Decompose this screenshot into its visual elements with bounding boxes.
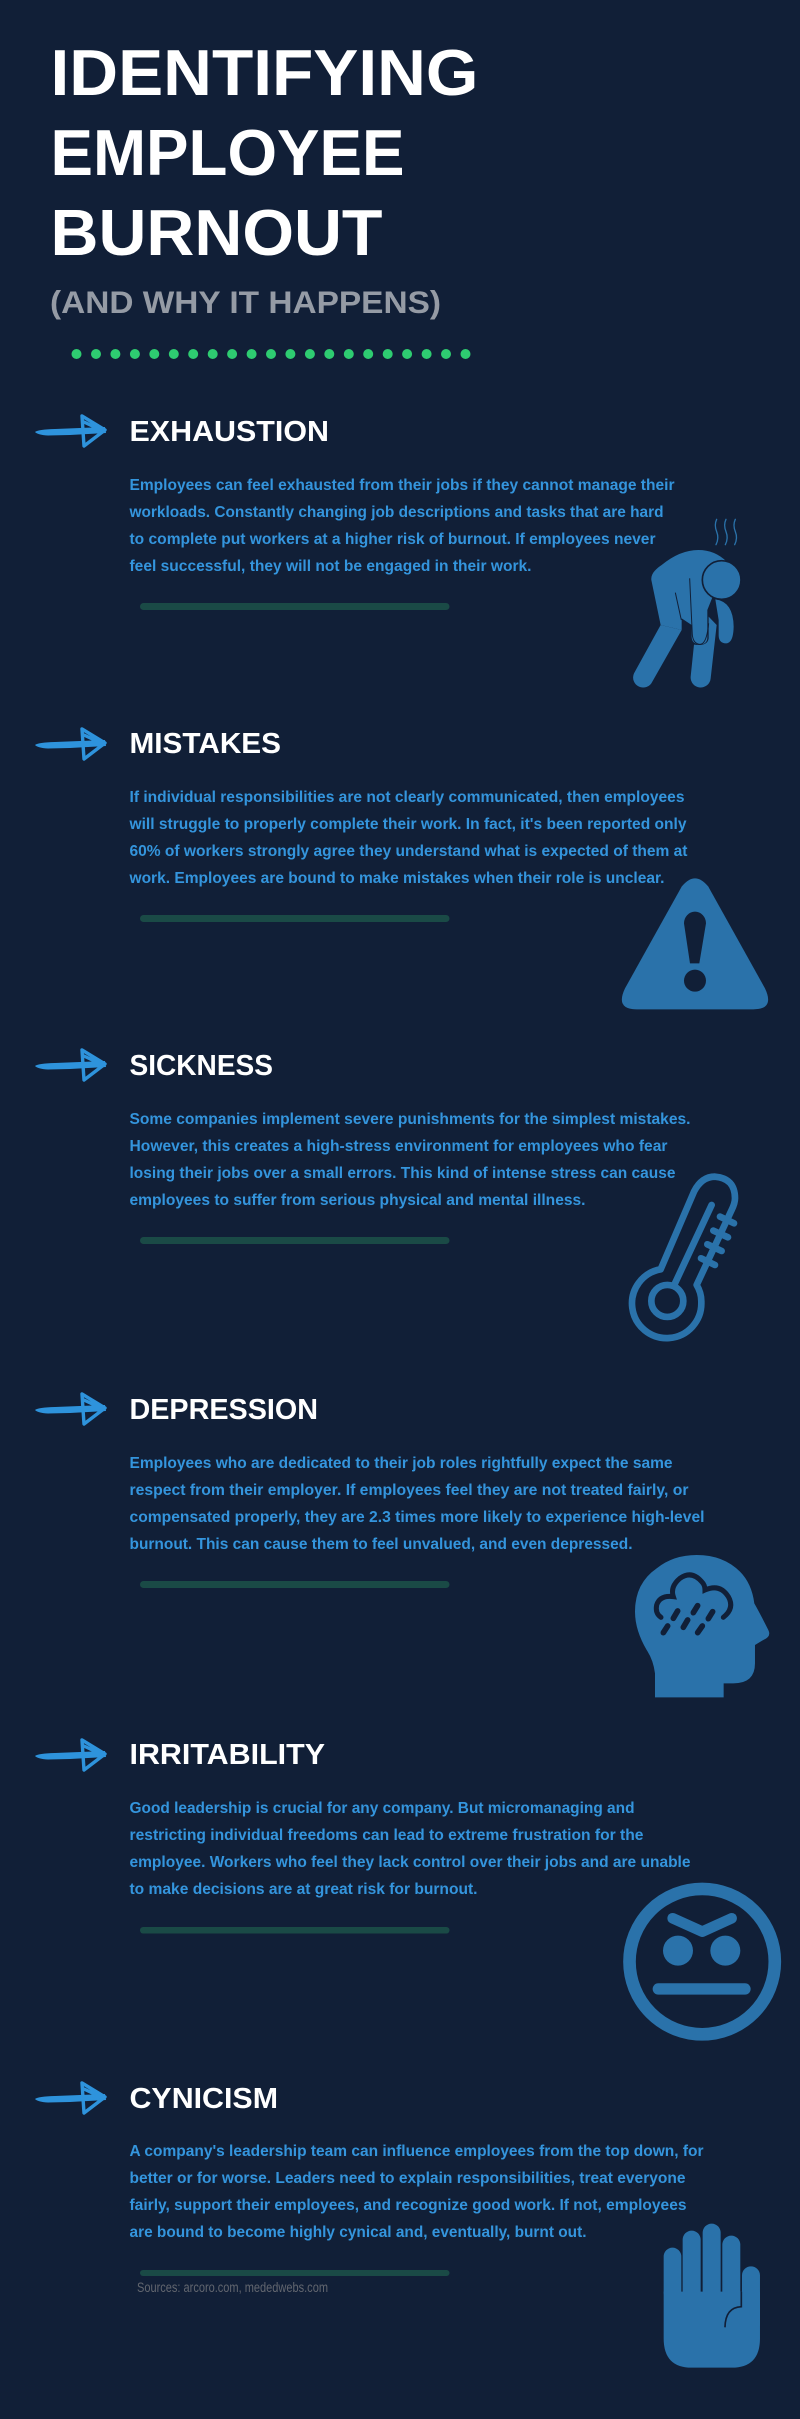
arrow	[35, 1394, 106, 1424]
body text: to make decisions are at great risk for burnout.	[130, 1881, 478, 1898]
heading: SICKNESS	[130, 1050, 273, 1082]
icon: angry face	[629, 1889, 775, 2034]
icon: head with rain cloud	[635, 1555, 769, 1697]
title: BURNOUT	[50, 196, 382, 269]
panel: exhaustion	[35, 416, 741, 688]
dotted divider	[72, 349, 470, 359]
body text: However, this creates a high-stress environment for employees who fear	[130, 1138, 668, 1155]
subtitle: (AND WHY IT HAPPENS)	[50, 284, 441, 320]
panel: irritability	[35, 1739, 775, 2034]
body text	[129, 477, 674, 575]
body text: burnout. This can cause them to feel unvalued, and even depressed.	[130, 1536, 632, 1553]
body text: employee. Workers who feel they lack control over their jobs and are unable	[130, 1854, 691, 1871]
body text	[128, 789, 687, 887]
body text: are bound to become highly cynical and, eventually, burnt out.	[130, 2224, 586, 2241]
body text: work. Employees are bound to make mistakes when their role is unclear.	[128, 870, 664, 887]
icon: thermometer	[632, 1177, 735, 1338]
body text: Some companies implement severe punishments for the simplest mistakes.	[130, 1111, 690, 1128]
panel: cynicism	[35, 2083, 760, 2368]
body text	[130, 1111, 690, 1209]
body text: losing their jobs over a small errors. This kind of intense stress can cause	[130, 1165, 676, 1182]
body text: Employees can feel exhausted from their jobs if they cannot manage their	[130, 477, 674, 494]
heading: DEPRESSION	[130, 1394, 318, 1426]
body text: fairly, support their employees, and recognize good work. If not, employees	[130, 2197, 686, 2214]
body text: compensated properly, they are 2.3 times more likely to experience high-level	[130, 1509, 704, 1526]
icon: warning triangle	[622, 878, 768, 1009]
body text: feel successful, they will not be engaged in their work.	[130, 558, 532, 575]
title: IDENTIFYING	[50, 36, 478, 109]
body text: Employees who are dedicated to their job roles rightfully expect the same	[130, 1455, 673, 1472]
arrow	[35, 2083, 106, 2113]
heading: EXHAUSTION	[130, 416, 329, 448]
heading: MISTAKES	[130, 728, 281, 760]
icon: raised hand	[664, 2224, 760, 2368]
body text: restricting individual freedoms can lead to extreme frustration for the	[130, 1827, 644, 1844]
panel: sickness	[35, 1050, 735, 1338]
panel: depression	[35, 1394, 769, 1697]
body text: employees to suffer from serious physical and mental illness.	[130, 1192, 586, 1209]
body text: will struggle to properly complete their work. In fact, it's been reported only	[128, 816, 687, 833]
body text: If individual responsibilities are not clearly communicated, then employees	[130, 789, 684, 806]
heading: IRRITABILITY	[130, 1739, 325, 1771]
arrow	[35, 1050, 106, 1080]
arrow	[35, 729, 106, 759]
heading: CYNICISM	[130, 2083, 278, 2115]
sources: Sources: arcoro.com, mededwebs.com	[137, 2280, 328, 2295]
body text: Good leadership is crucial for any company. But micromanaging and	[130, 1800, 634, 1817]
body text: A company's leadership team can influence employees from the top down, for	[130, 2143, 704, 2160]
arrow	[35, 1740, 106, 1770]
body text: 60% of workers strongly agree they understand what is expected of them at	[130, 843, 688, 860]
body text: to complete put workers at a higher risk of burnout. If employees never	[130, 531, 656, 548]
icon: exhausted person	[633, 519, 741, 688]
body text	[130, 2143, 704, 2241]
body text: workloads. Constantly changing job descriptions and tasks that are hard	[129, 504, 663, 521]
body text: better or for worse. Leaders need to explain responsibilities, treat everyone	[130, 2170, 686, 2187]
title: EMPLOYEE	[50, 116, 404, 189]
arrow	[35, 416, 106, 446]
body text: respect from their employer. If employees feel they are not treated fairly, or	[130, 1482, 688, 1499]
panel: mistakes	[35, 728, 768, 1009]
body text	[130, 1800, 691, 1898]
body text	[130, 1455, 704, 1553]
title	[50, 36, 478, 269]
